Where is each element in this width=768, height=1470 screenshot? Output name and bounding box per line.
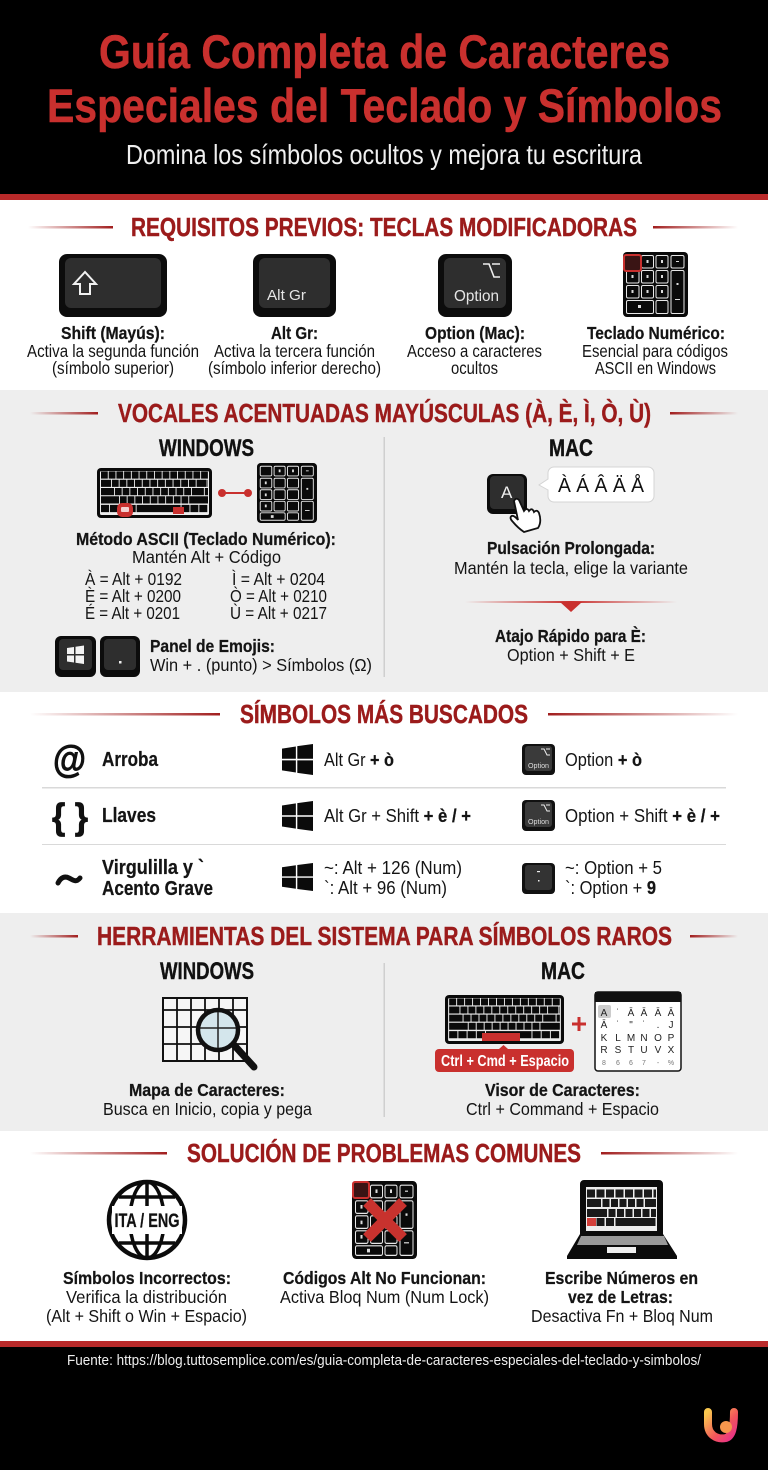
- title: Guía Completa de Caracteres: [99, 25, 670, 78]
- text: teclado numerico: Teclado Numérico:: [587, 323, 725, 343]
- text: escribe numeros: Desactiva Fn + Bloq Num: [531, 1306, 713, 1326]
- text: mapa de caracteres: Mapa de Caracteres:: [129, 1080, 285, 1100]
- text: metodo ascii: Ì = Alt + 0204: [232, 569, 325, 589]
- icon: braces: { }: [52, 796, 88, 837]
- text: panel de emojis: Win + . (punto) > Símbolos (Ω): [150, 655, 372, 675]
- row: llaves: [52, 796, 720, 837]
- icon: character viewer: 6: [616, 1060, 620, 1067]
- text: simbolos incorrectos: Símbolos Incorrectos:: [63, 1268, 231, 1288]
- icon: mac keyboard with shortcut: Ctrl + Cmd + Espacio: [441, 1053, 569, 1070]
- label: virgulilla: Acento Grave: [102, 878, 213, 900]
- icon: at sign: @: [53, 739, 86, 781]
- heading: requisitos: REQUISITOS PREVIOS: TECLAS MODIFICADORAS: [131, 212, 637, 242]
- text: alt gr: (símbolo inferior derecho): [208, 358, 381, 378]
- row: arroba: [53, 739, 642, 781]
- text: metodo ascii: É = Alt + 0201: [85, 603, 180, 623]
- source line: Fuente: https://blog.tuttosemplice.com/es/guia-completa-de-caracteres-especiales-del-teclado-y-simbolos/: [67, 1352, 702, 1369]
- text: option: [407, 323, 542, 378]
- icon: character viewer: 7: [642, 1060, 646, 1067]
- icon: character viewer: Ā: [641, 1007, 648, 1019]
- icon: alt gr key: Alt Gr: [267, 287, 306, 304]
- icon: shift key: [59, 254, 167, 317]
- icon: character viewer: Ā: [601, 1019, 608, 1031]
- icon: option key: [438, 254, 512, 317]
- footer: [0, 1341, 768, 1470]
- icon: character viewer: [595, 992, 681, 1071]
- text: atajo rapido: Atajo Rápido para È:: [495, 625, 646, 646]
- shortcut: windows llaves: Alt Gr + Shift + è / +: [324, 806, 471, 826]
- panel: requisitos previos: [0, 200, 768, 390]
- icon: character viewer: Ā: [628, 1007, 635, 1019]
- label: llaves: Llaves: [102, 805, 156, 827]
- text: escribe numeros: [531, 1268, 713, 1326]
- text: simbolos incorrectos: Verifica la distribución: [66, 1287, 227, 1307]
- icon: character viewer: O: [654, 1033, 662, 1044]
- icon: character viewer: .: [657, 1020, 659, 1031]
- text: metodo ascii: Método ASCII (Teclado Numérico):: [76, 529, 336, 549]
- icon: character viewer: A: [601, 1008, 608, 1019]
- heading: mac: MAC: [541, 958, 585, 985]
- heading: vocales: VOCALES ACENTUADAS MAYÚSCULAS (À, È, Ì, Ò, Ù): [118, 398, 651, 428]
- icon: character viewer: %: [668, 1060, 674, 1067]
- divider with arrow: [465, 601, 677, 612]
- icon: character viewer: 8: [602, 1060, 606, 1067]
- subtitle: Domina los símbolos ocultos y mejora tu escritura: [126, 139, 642, 170]
- shortcut: windows virgulilla: `: Alt + 96 (Num): [324, 878, 447, 898]
- panel: vocales acentuadas: [30, 398, 738, 677]
- icon: character viewer: V: [655, 1045, 662, 1056]
- text: codigos alt: Activa Bloq Num (Num Lock): [280, 1287, 489, 1307]
- shortcut: mac virgulilla: ~: Option + 5: [565, 858, 662, 878]
- text: shift: (símbolo superior): [52, 358, 174, 378]
- text: pulsacion prolongada: Mantén la tecla, elige la variante: [454, 558, 688, 578]
- text: pulsacion prolongada: [454, 538, 688, 578]
- text: shift: [27, 323, 199, 378]
- heading: mac: MAC: [549, 435, 593, 462]
- text: panel de emojis: [150, 636, 372, 675]
- icon: option key: [522, 800, 555, 831]
- icon: globe: ITA / ENG: [114, 1211, 180, 1232]
- text: shift: Shift (Mayús):: [61, 323, 165, 343]
- shortcut: mac arroba: Option + ò: [565, 750, 642, 770]
- logo: [708, 1412, 734, 1438]
- icon: character viewer: U: [640, 1045, 648, 1056]
- icon: numeric keypad: [623, 252, 688, 317]
- text: escribe numeros: vez de Letras:: [568, 1287, 673, 1307]
- text: metodo ascii: [76, 529, 336, 623]
- icon: windows logo: [282, 863, 313, 891]
- icon: plus: [572, 1017, 586, 1031]
- panel: solucion de problemas: [30, 1138, 738, 1326]
- text: visor de caracteres: Visor de Caracteres:: [485, 1080, 640, 1100]
- label: virgulilla: Virgulilla y `: [102, 857, 204, 879]
- text: simbolos incorrectos: (Alt + Shift o Win + Espacio): [46, 1306, 247, 1326]
- icon: laptop: [567, 1180, 677, 1259]
- icon: character viewer: N: [640, 1033, 648, 1044]
- text: option: ocultos: [451, 358, 498, 378]
- icon: long press key with accent popup: À Á Â Ä Å: [558, 474, 645, 497]
- icon: character viewer: S: [615, 1045, 622, 1056]
- text: metodo ascii: Ù = Alt + 0217: [230, 602, 327, 623]
- row: virgulilla: [58, 857, 662, 900]
- text: teclado numerico: ASCII en Windows: [595, 358, 716, 378]
- shortcut: windows virgulilla: ~: Alt + 126 (Num): [324, 858, 462, 878]
- shortcut: windows arroba: Alt Gr + ò: [324, 750, 394, 770]
- icon: character viewer: ˙: [616, 1008, 620, 1019]
- heading: solucion: SOLUCIÓN DE PROBLEMAS COMUNES: [187, 1138, 581, 1168]
- text: alt gr: [208, 323, 381, 378]
- icon: windows and period keys: [55, 636, 140, 677]
- text: panel de emojis: Panel de Emojis:: [150, 636, 275, 656]
- icon: option key: Option: [454, 288, 499, 305]
- shortcut: mac virgulilla: [565, 858, 662, 898]
- icon: globe: [109, 1182, 185, 1258]
- icon: character map magnifier: [163, 998, 254, 1067]
- icon: character viewer: M: [627, 1033, 635, 1044]
- label: arroba: Arroba: [102, 749, 159, 771]
- text: metodo ascii: È = Alt + 0200: [85, 586, 181, 606]
- icon: character viewer: -: [657, 1060, 660, 1067]
- icon: character viewer: L: [615, 1033, 621, 1044]
- text: metodo ascii: Ò = Alt + 0210: [230, 585, 327, 606]
- icon: character viewer: R: [600, 1045, 608, 1056]
- icon: character viewer: ˙: [642, 1020, 646, 1031]
- icon: mac keyboard with shortcut: [435, 995, 574, 1072]
- icon: tilde: [58, 877, 80, 883]
- text: shift: Activa la segunda función: [27, 341, 199, 361]
- icon: windows logo: [282, 801, 313, 831]
- text: simbolos incorrectos: [46, 1268, 247, 1326]
- icon: option key: Option: [528, 819, 549, 826]
- heading: simbolos: SÍMBOLOS MÁS BUSCADOS: [240, 699, 528, 729]
- shortcut: windows virgulilla: [324, 858, 462, 898]
- text: metodo ascii: Mantén Alt + Código: [132, 547, 281, 567]
- text: teclado numerico: Esencial para códigos: [582, 341, 728, 361]
- text: mapa de caracteres: [103, 1080, 312, 1119]
- icon: character viewer: J: [668, 1020, 674, 1031]
- text: option: Acceso a caracteres: [407, 341, 542, 361]
- icon: character viewer: K: [601, 1033, 608, 1044]
- text: alt gr: Alt Gr:: [271, 323, 318, 343]
- icon: option key: Option: [528, 763, 549, 770]
- icon: character viewer: Ā: [655, 1007, 662, 1019]
- panel: herramientas del sistema: [30, 921, 738, 1119]
- label: virgulilla: [102, 857, 213, 900]
- text: visor de caracteres: Ctrl + Command + Espacio: [466, 1099, 659, 1119]
- text: option: Option (Mac):: [425, 323, 525, 343]
- text: visor de caracteres: [466, 1080, 659, 1119]
- text: pulsacion prolongada: Pulsación Prolongada:: [487, 538, 655, 558]
- icon: character viewer: T: [628, 1045, 634, 1056]
- text: alt gr: Activa la tercera función: [214, 341, 375, 361]
- icon: character viewer: 6: [629, 1060, 633, 1067]
- icon: keyboard and keypad: [97, 463, 317, 523]
- icon: character viewer: X: [668, 1045, 675, 1056]
- heading: windows: WINDOWS: [160, 958, 254, 985]
- icon: character viewer: ": [629, 1020, 633, 1031]
- header banner: [0, 0, 768, 200]
- text: metodo ascii: À = Alt + 0192: [85, 569, 182, 589]
- text: atajo rapido: Option + Shift + E: [507, 645, 635, 665]
- heading: windows: WINDOWS: [159, 435, 254, 462]
- text: mapa de caracteres: Busca en Inicio, copia y pega: [103, 1099, 312, 1119]
- text: codigos alt: [280, 1268, 489, 1307]
- text: atajo rapido: [495, 625, 646, 665]
- panel: simbolos mas buscados: [30, 699, 738, 900]
- icon: long press key with accent popup: A: [501, 483, 513, 502]
- icon: character viewer: ˙: [616, 1020, 620, 1031]
- icon: option key: [522, 744, 555, 775]
- title: [47, 25, 722, 132]
- icon: long press key with accent popup: [487, 467, 654, 532]
- icon: character viewer: P: [668, 1033, 675, 1044]
- text: escribe numeros: Escribe Números en: [545, 1268, 698, 1288]
- shortcut: mac llaves: Option + Shift + è / +: [565, 806, 720, 826]
- icon: character viewer: Ā: [668, 1007, 675, 1019]
- icon: tilde key: [522, 863, 555, 894]
- shortcut: mac virgulilla: `: Option + 9: [565, 878, 656, 898]
- text: codigos alt: Códigos Alt No Funcionan:: [283, 1268, 486, 1288]
- text: teclado numerico: [582, 323, 728, 378]
- icon: alt gr key: [253, 254, 336, 317]
- icon: crossed keypad: [352, 1181, 417, 1259]
- icon: windows logo: [282, 744, 313, 775]
